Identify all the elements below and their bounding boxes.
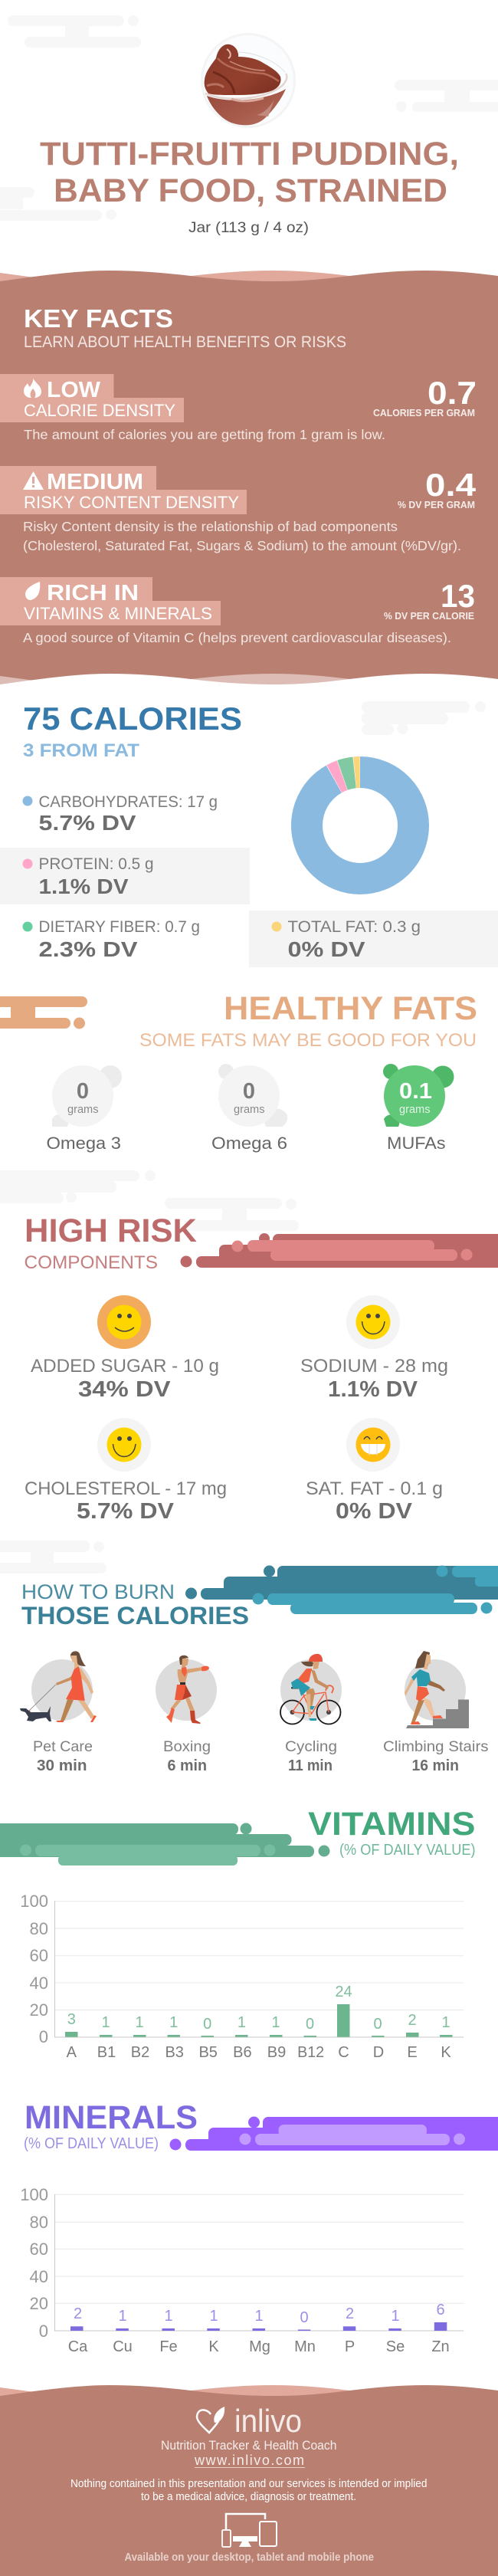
decoration: vitamins bars [0,1823,329,1866]
bar chart: minerals: P [345,2338,355,2355]
bar chart: vitamins: E [407,2044,418,2061]
bar chart: minerals: Mn [294,2338,316,2355]
activity labels: 16 min [412,1757,459,1774]
activity labels: Boxing [163,1739,211,1755]
bar chart: vitamins: 2 [408,2012,417,2029]
rich in vitamins and minerals: A good source of Vitamin C (helps prevent cardiovascular diseases). [23,630,451,645]
medium risky content density: RISKY CONTENT DENSITY [24,493,239,512]
bar chart: vitamins: 20 [30,2000,48,2020]
mufas badge: MUFAs [387,1134,446,1153]
footer text [70,2438,428,2503]
bar chart: minerals: 0 [39,2322,48,2341]
activity labels: 6 min [167,1757,207,1774]
omega 6 badge: grams [234,1103,265,1116]
saturated fat: 0% DV [336,1499,413,1524]
activity: pet care [20,1651,97,1722]
cholesterol: 5.7% DV [77,1499,175,1524]
how to burn heading [21,1580,249,1629]
panel: key facts [0,271,498,694]
added sugar: 34% DV [78,1377,171,1402]
bar chart: vitamins: 24 [335,1984,352,2000]
activity: climbing stairs [405,1651,469,1728]
bar chart: minerals: 0 [300,2309,309,2326]
legend: protein: 1.1% DV [38,875,129,898]
bar chart: minerals: Se [386,2338,405,2355]
icon: devices [222,2514,277,2547]
low calorie density: CALORIE DENSITY [24,401,175,420]
bar chart: vitamins: 1 [441,2014,450,2031]
bar chart: minerals [20,2185,464,2355]
bar chart: minerals: K [208,2338,219,2355]
medium risky content density [0,466,477,553]
bar chart: minerals: 100 [20,2185,48,2204]
activity labels: Pet Care [33,1739,93,1755]
bar chart: minerals: Cu [113,2338,133,2355]
sodium: SODIUM - 28 mg [300,1356,448,1377]
bar chart: vitamins: B2 [131,2044,149,2061]
rich in vitamins and minerals: % DV PER CALORIE [384,610,474,622]
mufas badge [383,1064,454,1153]
bar chart: minerals: 1 [118,2308,127,2325]
bar chart: vitamins: A [67,2044,77,2061]
high risk heading: COMPONENTS [25,1252,158,1273]
activity labels: 11 min [288,1757,333,1774]
bar chart: minerals: Ca [68,2338,88,2355]
legend: dietary fiber: DIETARY FIBER: 0.7 g [38,917,200,936]
legend: dietary fiber: 2.3% DV [38,937,138,961]
donut chart: macronutrients [306,773,414,878]
omega 3 badge: Omega 3 [46,1134,121,1153]
saturated fat: SAT. FAT - 0.1 g [306,1478,443,1499]
low calorie density [0,374,477,442]
bar chart: vitamins: 100 [20,1892,48,1911]
bar chart: vitamins: C [338,2044,349,2061]
omega 6 badge: Omega 6 [211,1134,287,1153]
title: BABY FOOD, STRAINED [54,172,447,209]
icon: inlivo heart logo [197,2407,224,2433]
low calorie density: CALORIES PER GRAM [373,407,475,418]
legend: protein [0,848,250,904]
bar chart: minerals: 80 [30,2213,48,2232]
rich in vitamins and minerals: RICH IN [47,581,139,605]
activity: cycling [280,1654,342,1724]
cholesterol [25,1418,227,1524]
bar chart: vitamins: B6 [233,2044,252,2061]
footer panel [0,2385,498,2576]
high risk heading [25,1213,197,1273]
legend: dietary fiber [23,917,200,961]
bar chart: vitamins: B9 [267,2044,286,2061]
bar chart: minerals: Fe [159,2338,178,2355]
bar chart: vitamins: B1 [97,2044,116,2061]
medium risky content density: Risky Content density is the relationship of bad components [23,519,398,534]
low calorie density: The amount of calories you are getting from 1 gram is low. [24,427,385,442]
bar chart: vitamins: 1 [135,2014,144,2031]
legend: carbohydrates: 5.7% DV [38,811,136,835]
rich in vitamins and minerals: 13 [441,578,475,614]
healthy fats heading: SOME FATS MAY BE GOOD FOR YOU [139,1030,477,1051]
saturated fat [306,1418,443,1524]
footer text: Nutrition Tracker & Health Coach [161,2438,337,2453]
bar chart: vitamins: 1 [238,2014,246,2031]
bar chart: vitamins: B12 [297,2044,324,2061]
omega 3 badge: 0 [77,1079,89,1104]
decoration: high risk bars [181,1233,498,1268]
vitamins heading: (% OF DAILY VALUE) [339,1842,475,1859]
omega 6 badge [211,1064,287,1153]
activity: boxing [156,1656,217,1724]
bar chart: minerals: 20 [30,2294,48,2313]
legend: carbohydrates [23,792,218,835]
activity labels: Cycling [285,1739,337,1755]
minerals heading: (% OF DAILY VALUE) [24,2135,159,2152]
bar chart: minerals: 2 [346,2305,354,2322]
medium risky content density: 0.4 [425,467,477,503]
mufas badge: grams [399,1103,431,1116]
bar chart: minerals: 1 [164,2308,173,2325]
rich in vitamins and minerals: VITAMINS & MINERALS [24,604,212,623]
bar chart: minerals: 6 [436,2302,445,2318]
rich in vitamins and minerals [0,577,475,645]
footer text: to be a medical advice, diagnosis or treatment. [141,2491,356,2503]
added sugar: ADDED SUGAR - 10 g [31,1356,219,1377]
bar chart: vitamins: 1 [101,2014,110,2031]
bar chart: minerals: Zn [431,2338,450,2355]
how to burn heading: THOSE CALORIES [21,1602,249,1629]
calories heading: 75 CALORIES [23,701,242,737]
omega 3 badge [46,1065,122,1153]
medium risky content density: MEDIUM [47,470,143,494]
bar chart: minerals: 1 [254,2308,264,2325]
bar chart: vitamins [20,1892,464,2061]
activity labels: Climbing Stairs [383,1739,489,1755]
decoration: minerals bars [170,2117,498,2151]
medium risky content density: % DV PER GRAM [398,499,475,510]
bar chart: vitamins: 3 [67,2011,76,2028]
serving size: Jar (113 g / 4 oz) [188,220,309,236]
bar chart: minerals: 60 [30,2240,48,2259]
vitamins heading: VITAMINS [308,1806,475,1843]
legend: total fat: TOTAL FAT: 0.3 g [288,917,421,936]
healthy fats heading: HEALTHY FATS [224,990,477,1027]
title [40,136,459,209]
bar chart: vitamins: 80 [30,1919,48,1938]
bar chart: minerals: 40 [30,2267,48,2286]
bar chart: vitamins: B5 [198,2044,218,2061]
how to burn heading: HOW TO BURN [21,1580,175,1603]
bar chart: minerals: 1 [391,2308,400,2325]
bar chart: minerals: Mg [249,2338,270,2355]
vitamins heading [308,1806,475,1859]
high risk heading: HIGH RISK [25,1213,197,1249]
bar chart: vitamins: K [441,2044,451,2061]
added sugar [31,1295,219,1402]
bar chart: vitamins: 0 [39,2027,48,2046]
bar chart: vitamins: 1 [271,2014,280,2031]
legend: total fat: 0% DV [288,937,365,961]
omega 6 badge: 0 [243,1079,255,1104]
sodium [300,1295,448,1402]
inlivo wordmark: inlivo [234,2403,302,2439]
low calorie density: 0.7 [428,375,477,411]
legend: total fat [249,911,498,967]
medium risky content density: (Cholesterol, Saturated Fat, Sugars & Sodium) to the amount (%DV/gr). [23,538,461,553]
calories heading [23,701,242,761]
food photo: pudding in glass bowl [201,33,296,128]
low calorie density: LOW [47,378,101,402]
bar chart: vitamins: 60 [30,1946,48,1965]
bar chart: vitamins: B3 [165,2044,184,2061]
bar chart: minerals: 2 [74,2305,82,2322]
bar chart: vitamins: 0 [203,2016,211,2033]
cholesterol: CHOLESTEROL - 17 mg [25,1478,227,1499]
activity labels: 30 min [37,1757,87,1774]
omega 3 badge: grams [67,1103,98,1116]
key facts heading [24,304,346,351]
footer text: Nothing contained in this presentation and our services is intended or implied [70,2478,428,2490]
legend: carbohydrates: CARBOHYDRATES: 17 g [38,792,218,811]
bar chart: vitamins: 0 [306,2016,314,2033]
bar chart: minerals: 1 [209,2308,218,2325]
bar chart: vitamins: 0 [373,2016,382,2033]
sodium: 1.1% DV [328,1377,418,1402]
bar chart: vitamins: 1 [169,2014,178,2031]
minerals heading [24,2099,198,2152]
decoration: burn calories bars [185,1565,498,1614]
key facts heading: LEARN ABOUT HEALTH BENEFITS OR RISKS [24,333,346,351]
activity labels [33,1739,489,1774]
bar chart: vitamins: 40 [30,1974,48,1993]
decoration: healthy fats bars [0,996,87,1029]
calories heading: 3 FROM FAT [23,740,139,761]
key facts heading: KEY FACTS [24,304,173,333]
legend: protein: PROTEIN: 0.5 g [38,855,153,873]
minerals heading: MINERALS [25,2099,198,2136]
mufas badge: 0.1 [399,1079,432,1104]
title: TUTTI-FRUITTI PUDDING, [40,136,459,172]
footer text: www.inlivo.com [194,2453,304,2468]
availability note: Available on your desktop, tablet and mobile phone [124,2551,374,2564]
bar chart: vitamins: D [373,2044,384,2061]
healthy fats heading [139,990,477,1051]
